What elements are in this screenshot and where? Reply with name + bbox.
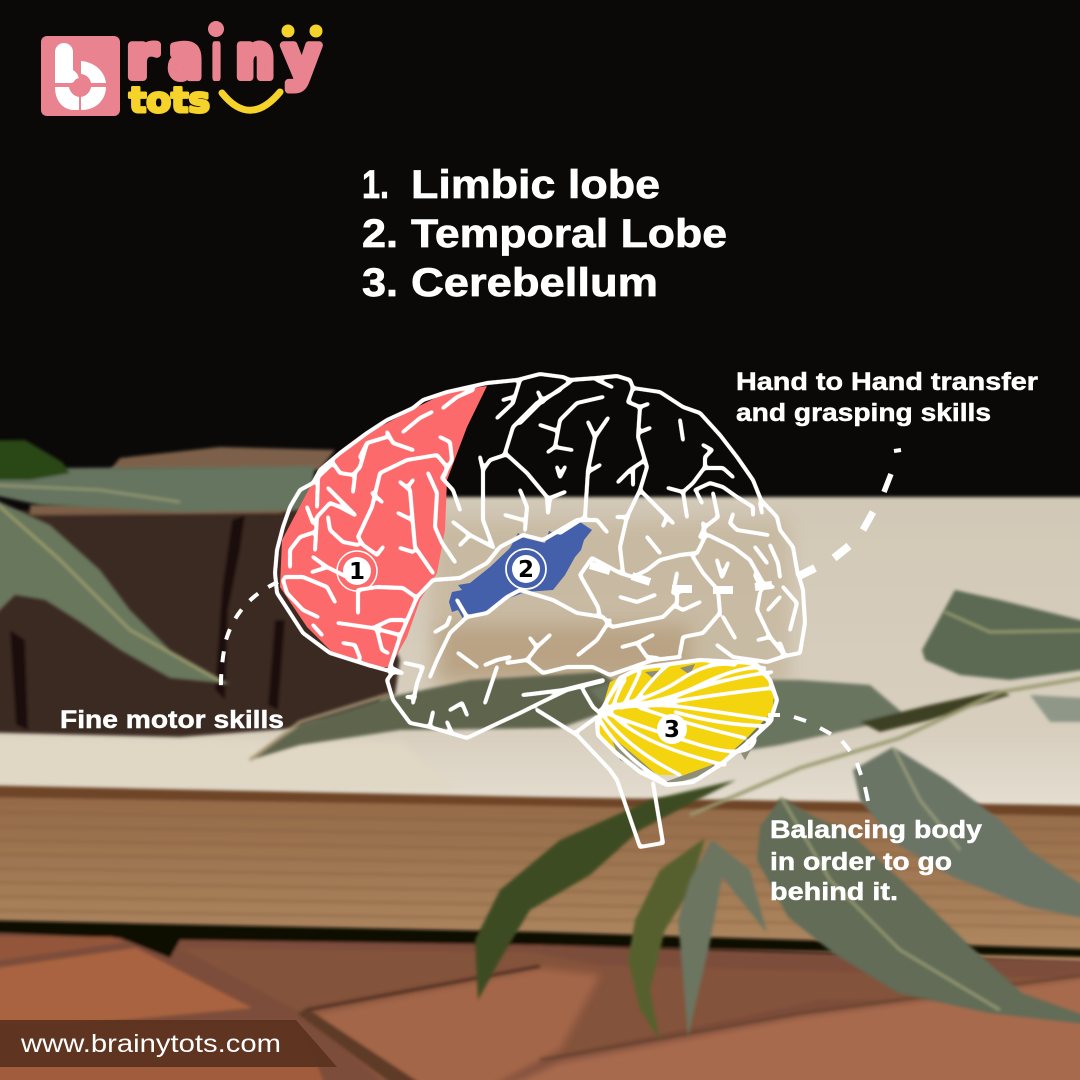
heading list: Cerebellum	[411, 261, 658, 305]
logo word: rainy: a	[169, 23, 202, 91]
logo word: rainy: n	[236, 23, 274, 91]
dashed arrow: fine motor skills	[221, 582, 278, 697]
heading list: Temporal Lobe	[411, 212, 727, 256]
logo word: rainy: y	[283, 23, 320, 91]
cerebellum gaps	[610, 664, 755, 782]
logo badge	[41, 36, 120, 116]
logo smile	[222, 92, 280, 110]
badge 1: 1	[349, 559, 365, 585]
brain outline and folds	[275, 374, 805, 847]
heading list: 1.	[362, 163, 389, 207]
leaves	[0, 440, 1080, 1040]
logo dots	[208, 21, 322, 38]
logo	[41, 21, 322, 121]
label: hand to hand	[736, 368, 1038, 427]
website banner: www.brainytots.com	[20, 1030, 281, 1058]
badge 2: 2	[518, 557, 534, 583]
label: balancing: in order to go	[770, 848, 952, 876]
label: balancing	[770, 816, 982, 906]
heading list: 3.	[362, 261, 398, 305]
label: fine motor: Fine motor skills	[60, 706, 284, 734]
label: hand to hand: and grasping skills	[736, 399, 991, 427]
heading list: 2.	[362, 212, 398, 256]
badge 3: 3	[664, 717, 680, 743]
cerebellum folds	[597, 660, 777, 785]
label: balancing: behind it.	[770, 878, 898, 906]
heading list: Limbic lobe	[411, 163, 660, 207]
label: hand to hand: Hand to Hand transfer	[736, 368, 1038, 396]
dashed arrow: hand to hand	[590, 450, 901, 590]
heading list	[362, 163, 727, 305]
logo word: rainy	[127, 23, 320, 91]
dashed arrow: balancing	[768, 715, 868, 801]
tree stump	[0, 447, 400, 737]
badge 2	[506, 549, 546, 589]
label: balancing: Balancing body	[770, 816, 982, 844]
logo word: rainy: r	[127, 23, 157, 91]
cerebellum fill	[598, 660, 775, 775]
website banner	[0, 1020, 337, 1067]
limbic lobe fill	[280, 386, 487, 668]
brain illustration	[275, 374, 805, 847]
badge 3	[657, 714, 687, 744]
logo word: tots: tots	[129, 81, 210, 121]
badge 1	[337, 551, 377, 591]
logo word: rainy: ı	[212, 23, 221, 91]
temporal lobe fill	[449, 522, 592, 622]
